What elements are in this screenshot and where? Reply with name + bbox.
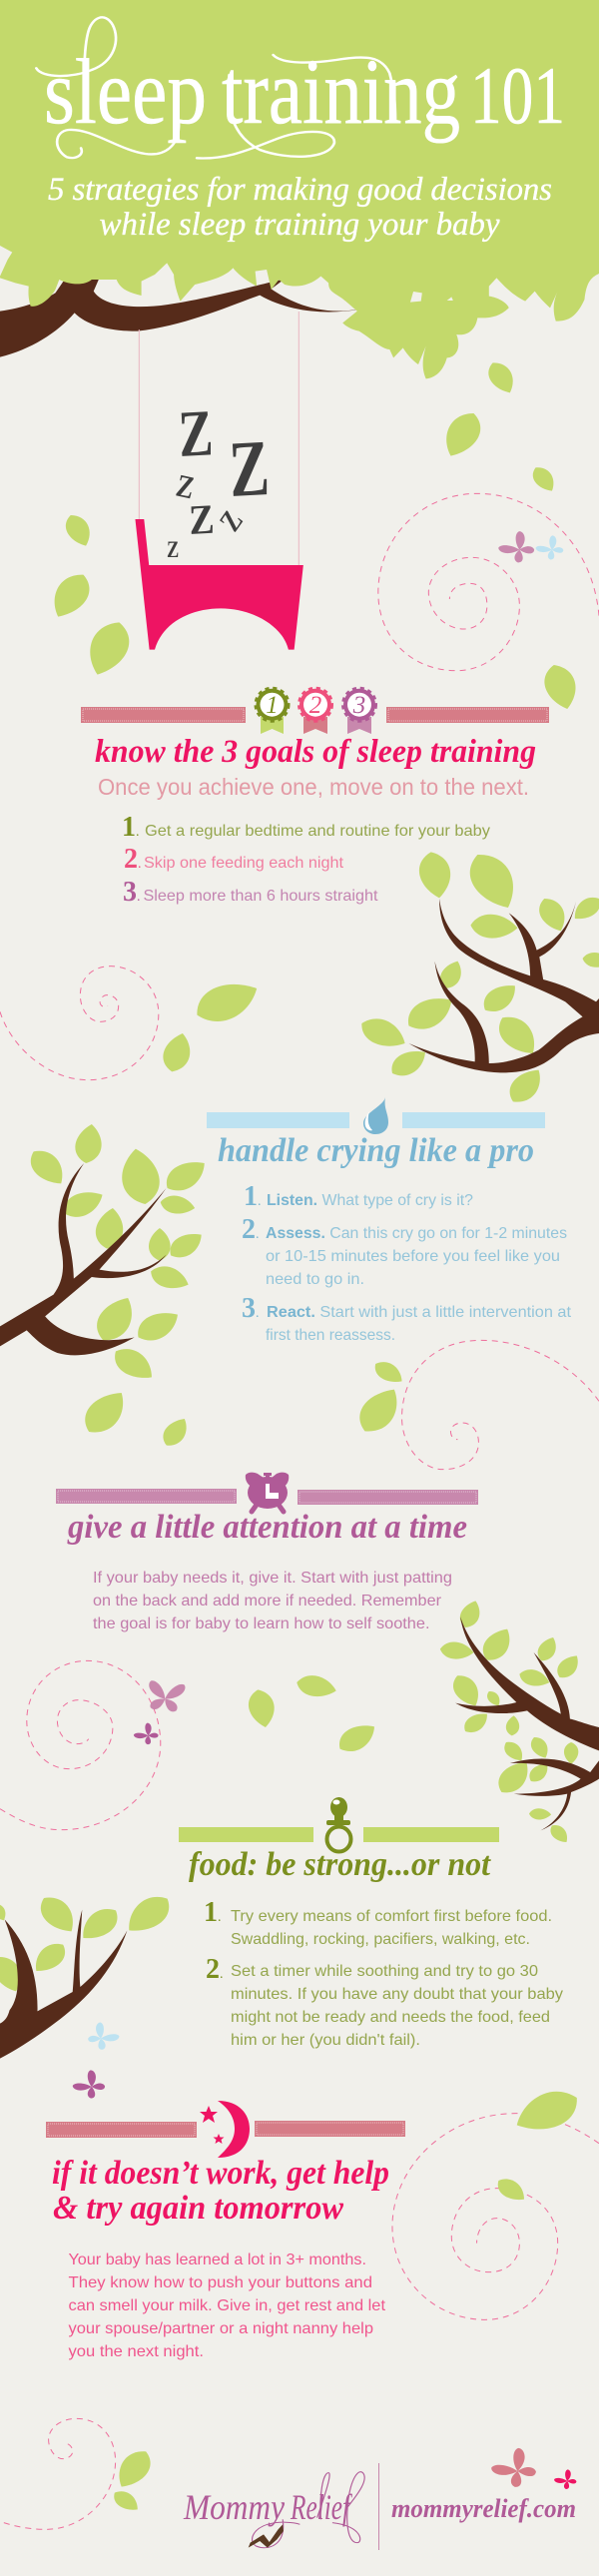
list: goals: 1. (122, 812, 140, 843)
sleeping Zs: Z (227, 424, 272, 514)
list: handle crying: 3. (242, 1293, 260, 1324)
header tree branch (0, 277, 359, 357)
icon: three goal ribbons: 3 (352, 692, 365, 719)
heading: know the 3 goals: know the 3 goals of sleep training (95, 734, 536, 770)
footer url: mommyrelief.com (391, 2494, 576, 2523)
list: handle crying: or 10-15 minutes before you feel like you (266, 1248, 560, 1265)
icon: pacifier (326, 1797, 351, 1851)
list: handle crying: need to go in. (266, 1271, 364, 1288)
text block: attention: If your baby needs it, give it. Start with just patting (93, 1570, 452, 1587)
leaves, section 5 right (492, 2083, 586, 2206)
sleeping Zs: Z (188, 495, 216, 543)
title: training (222, 41, 460, 144)
text block: attention: on the back and add more if needed. Remember (93, 1593, 442, 1610)
drifting leaves, section 2 (159, 973, 266, 1074)
tree left, section 4 (0, 1889, 178, 2059)
dashed spiral right, section 5 (392, 2114, 599, 2319)
list: goals: 2. (124, 844, 142, 875)
section 5 banner (46, 2121, 405, 2138)
drifting leaves, section 2 bottom (76, 1357, 408, 1450)
icon: three goal ribbons: 1 (266, 692, 279, 719)
footer divider (377, 2463, 379, 2550)
icon: moon and stars (200, 2101, 250, 2158)
icon: three goal ribbons: 2 (309, 692, 321, 719)
heading: if it doesn't work: if it doesn’t work, get help (52, 2155, 389, 2192)
title: sleep (44, 41, 207, 144)
subtitle: while sleep training your baby (100, 207, 500, 243)
list: goals (122, 812, 490, 908)
title: 101 (470, 50, 565, 141)
icon: tear drop (363, 1097, 388, 1134)
subheading: Once you achieve one, move on to the next. (98, 774, 529, 800)
list: food: 2. (206, 1954, 224, 1985)
list: goals: Skip one feeding each night (144, 855, 344, 872)
tree left, section 2 (0, 1123, 213, 1386)
logo: Mommy Relief: Relief (290, 2487, 353, 2527)
heading: if it doesn't work: & try again tomorrow (53, 2190, 343, 2227)
dashed spiral left, section 2 (0, 966, 159, 1080)
title flourishes (36, 17, 395, 158)
text block: get help: can smell your milk. Give in, get rest and let (68, 2297, 386, 2314)
list: food: 1. (204, 1897, 222, 1928)
title (44, 41, 565, 144)
icon: alarm clock (246, 1473, 289, 1512)
dashed spiral top right (378, 493, 599, 671)
leaves footer left (109, 2445, 158, 2515)
text block: attention: the goal is for baby to learn how to self soothe. (93, 1615, 429, 1632)
list: handle crying (242, 1181, 572, 1344)
falling leaves near swing (44, 407, 582, 916)
swing ropes (139, 312, 299, 566)
list: handle crying: first then reassess. (266, 1327, 395, 1344)
logo: Mommy Relief: Mommy (183, 2487, 285, 2527)
butterflies footer (490, 2447, 579, 2491)
heading: handle crying: handle crying like a pro (218, 1132, 534, 1169)
drifting leaves, section 3 (246, 1672, 381, 1757)
heading: if it doesn't work (52, 2155, 389, 2227)
list: handle crying: 1. (244, 1181, 262, 1212)
icon: three goal ribbons (256, 689, 375, 734)
tree right, section 2 (355, 893, 599, 1108)
list: food: minutes. If you have any doubt that your baby (231, 1986, 563, 2003)
subtitle: 5 strategies for making good decisions (48, 172, 552, 208)
list: goals: Get a regular bedtime and routine for your baby (145, 823, 490, 840)
dashed spiral right, section 2 bottom (402, 1340, 599, 1470)
section 3 banner (56, 1489, 478, 1505)
text block: get help: Your baby has learned a lot in 3+ months. (68, 2252, 366, 2268)
section 4 banner (179, 1827, 499, 1842)
dashed spiral left, section 3 (0, 1660, 161, 1830)
header canopy (0, 0, 599, 397)
text block: attention (93, 1570, 452, 1632)
sleeping Zs: Z (173, 468, 197, 506)
subtitle (48, 172, 552, 243)
list: food: might not be ready and needs the food, feed (231, 2009, 550, 2026)
sleeping Zs: Z (177, 395, 215, 470)
sleeping Zs: Z (213, 505, 250, 537)
sleeping Zs: Z (167, 536, 179, 563)
butterflies, section 4 (72, 2022, 120, 2102)
butterflies top right (497, 530, 567, 566)
text block: get help: you the next night. (68, 2343, 204, 2360)
baby swing seat (135, 519, 303, 650)
dashed spiral footer left (4, 2418, 116, 2529)
section 1 banner (81, 707, 549, 723)
text block: get help (68, 2252, 386, 2360)
butterflies, section 3 (133, 1680, 186, 1747)
list: goals: Sleep more than 6 hours straight (144, 888, 378, 905)
text block: get help: They know how to push your buttons and (68, 2274, 372, 2291)
list: handle crying: Listen. What type of cry is it? (267, 1192, 473, 1209)
sleeping Zs (167, 395, 272, 563)
list: food: Try every means of comfort first before food. (231, 1908, 552, 1925)
heading: give a little attention: give a little attention at a time (67, 1509, 467, 1546)
list: food: him or her (you didn't fail). (231, 2032, 420, 2049)
heading: food: food: be strong...or not (189, 1846, 491, 1883)
list: handle crying: Assess. Can this cry go on for 1-2 minutes (266, 1225, 567, 1242)
list: food (204, 1897, 563, 2049)
list: handle crying: 2. (242, 1214, 260, 1245)
text block: get help: your spouse/partner or a night nanny help (68, 2320, 373, 2337)
list: handle crying: React. Start with just a little intervention at (267, 1304, 572, 1321)
logo: Mommy Relief (183, 2472, 364, 2548)
tree right, section 3 (439, 1599, 599, 1846)
list: goals: 3. (123, 877, 140, 908)
list: food: Swaddling, rocking, pacifiers, walking, etc. (231, 1931, 530, 1948)
list: food: Set a timer while soothing and try to go 30 (231, 1963, 538, 1980)
section 2 banner (207, 1112, 545, 1128)
